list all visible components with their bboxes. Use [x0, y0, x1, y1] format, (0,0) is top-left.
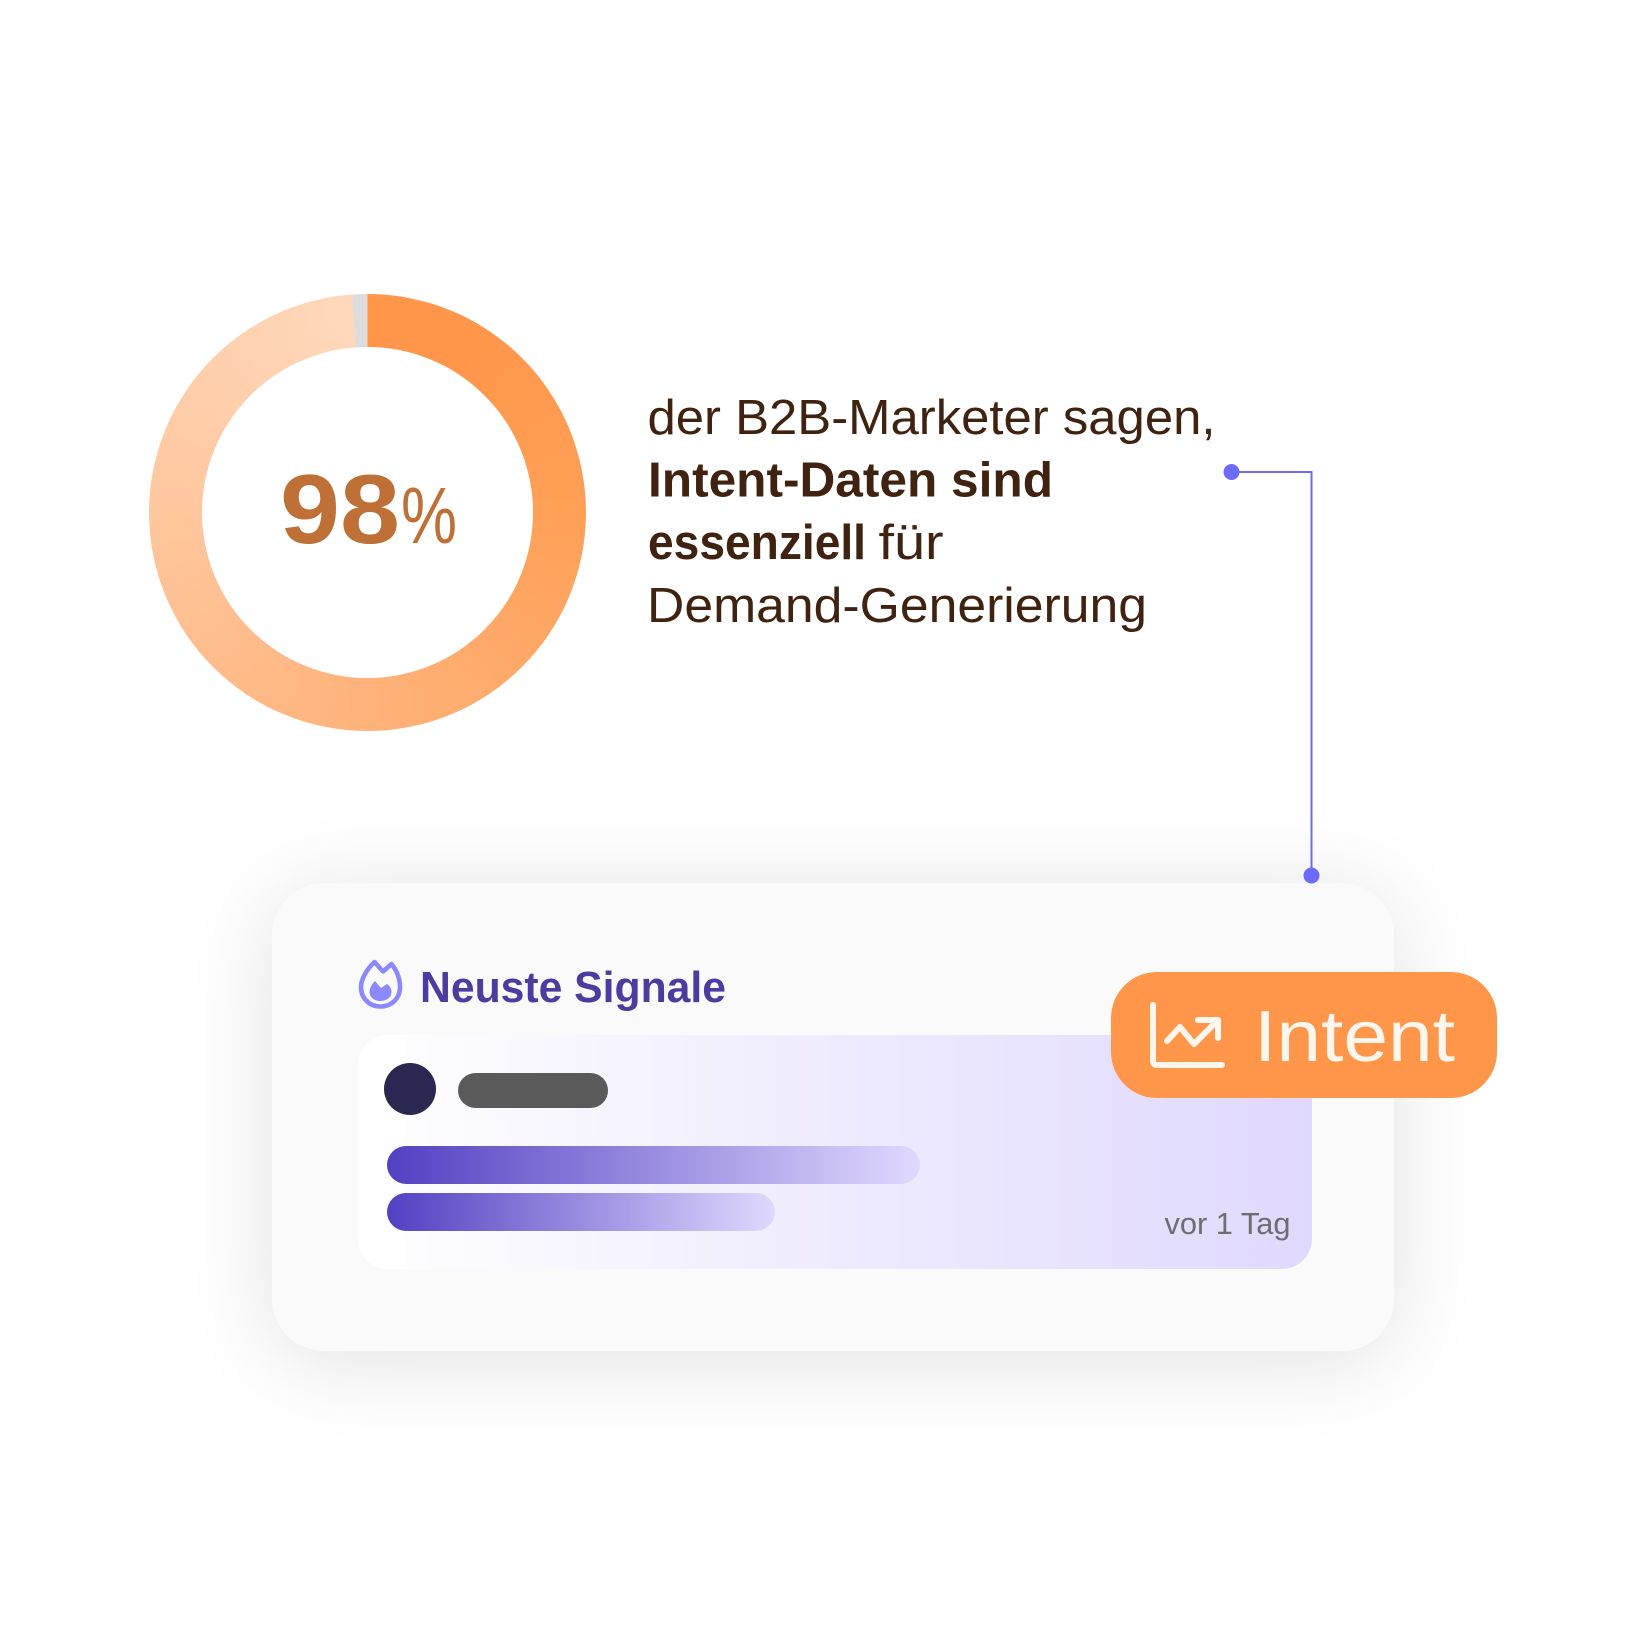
statement text: essenziell [648, 516, 866, 570]
message placeholder bar 2 [387, 1193, 775, 1231]
icon: trend chart [1153, 1005, 1222, 1065]
heading: Neuste Signale: Neuste Signale [420, 963, 726, 1012]
statement text: Demand-Generierung [647, 579, 1147, 633]
statement text: Intent-Daten sind [648, 454, 1053, 508]
badge label: Intent [1254, 997, 1455, 1077]
donut chart: 98% [149, 294, 586, 731]
connector line with dots [1224, 464, 1320, 884]
icon: flame [361, 962, 400, 1006]
donut ring [149, 294, 586, 731]
statement text: der B2B-Marketer sagen, [648, 391, 1216, 445]
signal row panel [358, 1035, 1312, 1269]
name placeholder pill [458, 1073, 608, 1108]
panel: signals card [272, 883, 1394, 1351]
statement text: für [878, 516, 944, 570]
donut value: 98 [280, 454, 400, 564]
avatar circle [384, 1063, 436, 1115]
badge: Intent [1111, 972, 1497, 1098]
message placeholder bar 1 [387, 1146, 920, 1184]
donut hole [202, 347, 533, 678]
statement text [647, 391, 1216, 633]
timestamp: vor 1 Tag [1164, 1206, 1290, 1241]
donut value: % [401, 471, 457, 560]
